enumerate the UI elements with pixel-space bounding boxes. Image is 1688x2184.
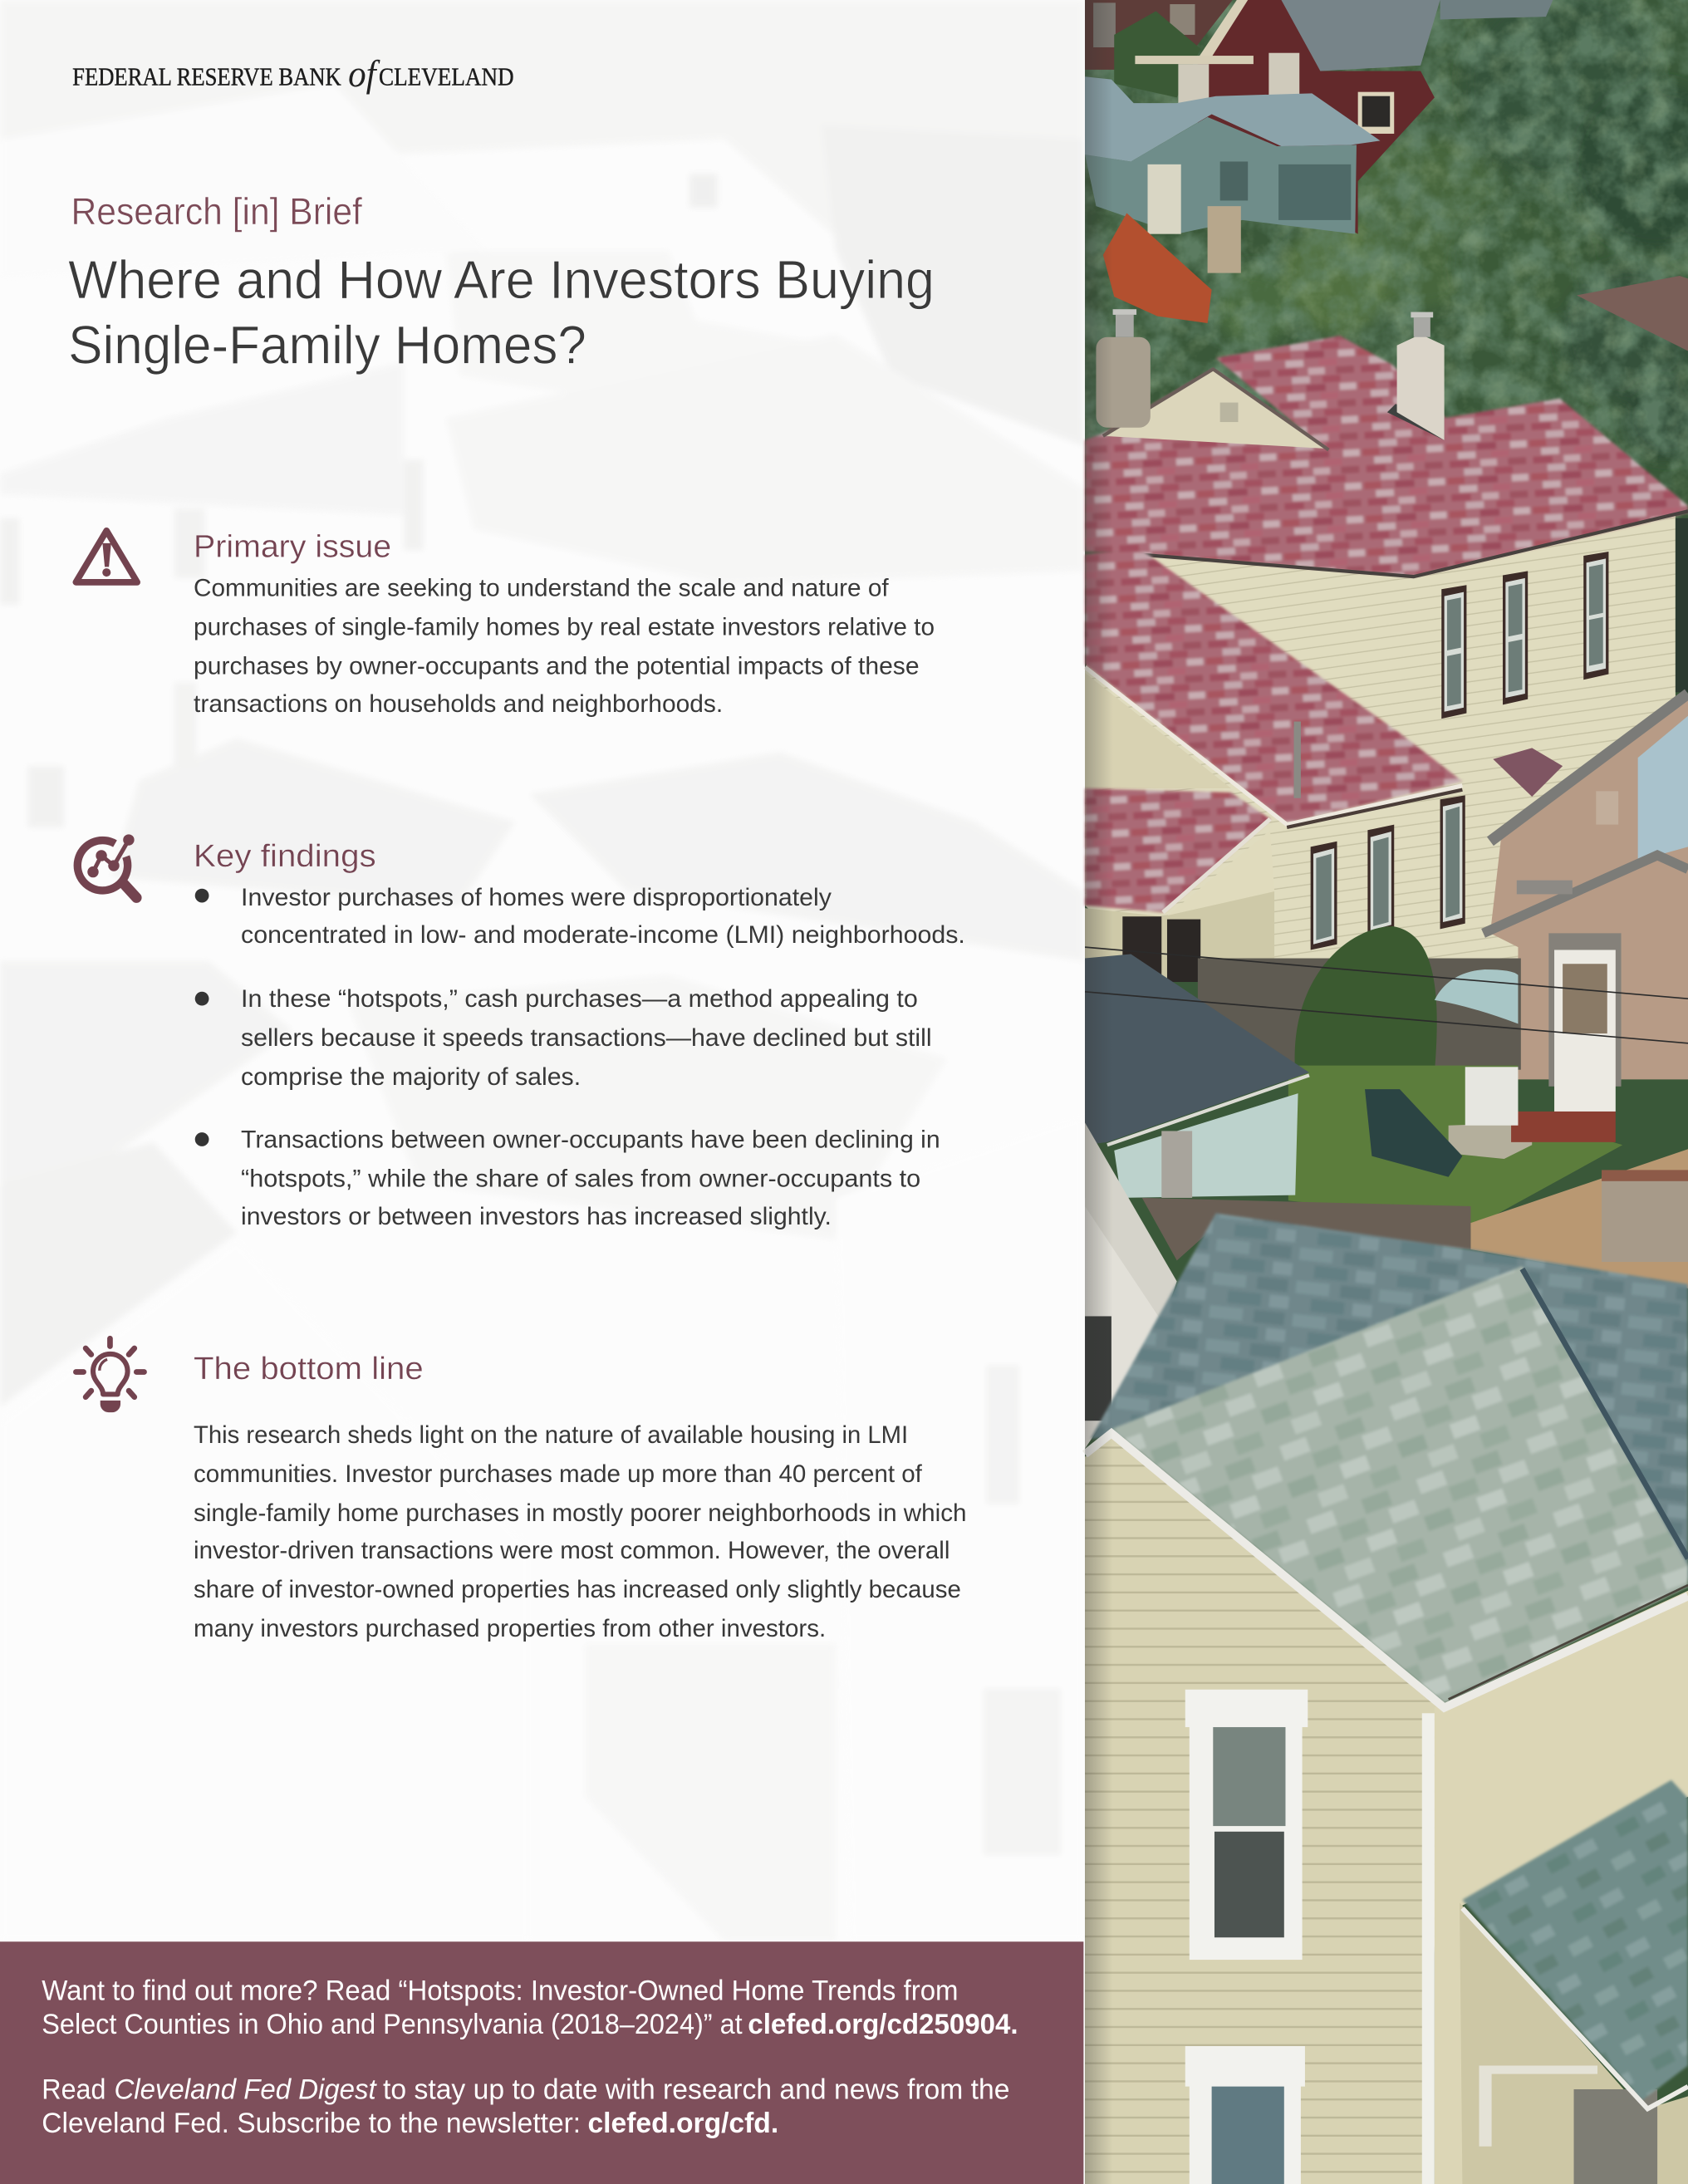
trees — [1085, 0, 1688, 585]
text block: primary issue: purchases of single-family homes by real estate investors relative to — [194, 615, 935, 641]
gable and main red roof — [1085, 336, 1688, 577]
text block: the bottom line: This research sheds light on the nature of available housing in LMI — [194, 1422, 908, 1449]
roof trim — [1085, 1433, 1688, 1708]
text block: primary issue: purchases by owner-occupants and the potential impacts of these — [194, 654, 920, 680]
upper window — [1185, 1690, 1308, 1960]
small white house — [1085, 1122, 1177, 1449]
footer panel — [0, 1941, 1083, 2184]
section: the bottom line — [194, 1351, 967, 1642]
back green roof — [1091, 1213, 1688, 1581]
cream siding wall — [1085, 1435, 1445, 2184]
footer text: subscribe: clefed.org/cfd. — [588, 2108, 778, 2139]
finding 1 — [195, 885, 965, 949]
dark grey roof — [1085, 955, 1309, 1145]
third red roof and porch — [1085, 788, 1270, 912]
logo: CLEVELAND — [379, 62, 514, 91]
footer text: read more: Select Counties in Ohio and Pennsylvania (2018–2024)” at — [42, 2009, 743, 2040]
front green roof — [1111, 1266, 1688, 1704]
bush and fence — [1198, 959, 1521, 1070]
text block: primary issue — [194, 576, 935, 718]
finding 3: Transactions between owner-occupants have been declining in — [241, 1127, 940, 1154]
main cream wall — [1085, 515, 1676, 982]
panel: photograph of rooftops — [1085, 0, 1688, 2184]
finding 1: concentrated in low- and moderate-income (LMI) neighborhoods. — [241, 922, 965, 949]
eyebrow: Research [in] Brief: Research [in] Brief — [71, 190, 362, 233]
small porch roof — [1493, 748, 1563, 797]
text block: the bottom line: communities. Investor purchases made up more than 40 percent of — [194, 1461, 923, 1488]
footer text: subscribe: Cleveland Fed Digest — [114, 2074, 377, 2106]
text block: primary issue: transactions on households and neighborhoods. — [194, 691, 723, 718]
patio and chairs — [1449, 1122, 1532, 1159]
title — [68, 249, 935, 375]
power lines — [1085, 947, 1688, 1043]
edge shadow — [1085, 0, 1113, 2184]
right background roof — [1577, 276, 1688, 351]
title: Single-Family Homes? — [68, 315, 586, 375]
icon: warning triangle — [76, 531, 137, 582]
teal house — [1085, 117, 1357, 234]
text block: the bottom line: single-family home purchases in mostly poorer neighborhoods in which — [194, 1500, 967, 1527]
icon: magnifier with chart — [77, 834, 136, 898]
door — [1548, 933, 1622, 1112]
footer text: read more — [42, 1975, 1018, 2040]
heading: primary issue: Primary issue — [194, 529, 391, 564]
finding 3: investors or between investors has increased slightly. — [241, 1204, 832, 1230]
finding 2: In these “hotspots,” cash purchases—a method appealing to — [241, 986, 918, 1013]
lower window — [1185, 2046, 1305, 2184]
footer text: subscribe — [42, 2074, 1010, 2139]
finding 2 — [195, 986, 932, 1091]
footer text: subscribe: Read — [42, 2074, 106, 2106]
footer text: subscribe: to stay up to date with research and news from the — [383, 2074, 1010, 2106]
icon: light bulb — [76, 1338, 145, 1412]
text block: the bottom line: investor-driven transactions were most common. However, the overall — [194, 1538, 950, 1564]
lower left cream wall — [1085, 673, 1231, 788]
heading: the bottom line: The bottom line — [194, 1351, 424, 1386]
top brick buildings — [1085, 0, 1233, 70]
finding 1: Investor purchases of homes were disproportionately — [241, 885, 832, 911]
logo: of — [348, 53, 380, 95]
title: Where and How Are Investors Buying — [68, 249, 935, 310]
porch — [1460, 1902, 1688, 2184]
finding 3 — [195, 1127, 940, 1230]
finding 3: “hotspots,” while the share of sales from owner-occupants to — [241, 1166, 920, 1193]
lower right green roof — [1462, 1780, 1688, 2100]
text block: the bottom line: share of investor-owned properties has increased only slightly because — [194, 1577, 961, 1603]
text block: the bottom line — [194, 1422, 967, 1642]
section: key findings — [194, 838, 965, 1230]
shed — [1114, 1093, 1298, 1198]
patio umbrella — [1435, 969, 1518, 1023]
panel: faded photo background — [0, 0, 1085, 2184]
orange roof — [1103, 213, 1212, 323]
fences — [1142, 1198, 1470, 1260]
footer text: read more: clefed.org/cd250904. — [748, 2009, 1018, 2040]
second red roof — [1085, 547, 1462, 823]
finding 2: sellers because it speeds transactions—have declined but still — [241, 1025, 932, 1052]
chimneys — [1096, 309, 1445, 440]
windows upper row — [1311, 552, 1608, 950]
logo: FEDERAL RESERVE BANK — [72, 62, 341, 91]
finding 2: comprise the majority of sales. — [241, 1064, 581, 1091]
logo — [72, 53, 514, 95]
pink house — [1490, 694, 1688, 1079]
section: primary issue — [194, 529, 935, 718]
footer text: subscribe: Cleveland Fed. Subscribe to the newsletter: — [42, 2108, 581, 2139]
text block: the bottom line: many investors purchased properties from other investors. — [194, 1616, 826, 1642]
right wall — [1435, 1591, 1688, 2184]
footer text: read more: Want to find out more? Read “Hotspots: Investor-Owned Home Trends from — [42, 1975, 958, 2007]
heading: key findings: Key findings — [194, 838, 376, 873]
grass — [1288, 1066, 1622, 1229]
text block: primary issue: Communities are seeking to understand the scale and nature of — [194, 576, 890, 602]
